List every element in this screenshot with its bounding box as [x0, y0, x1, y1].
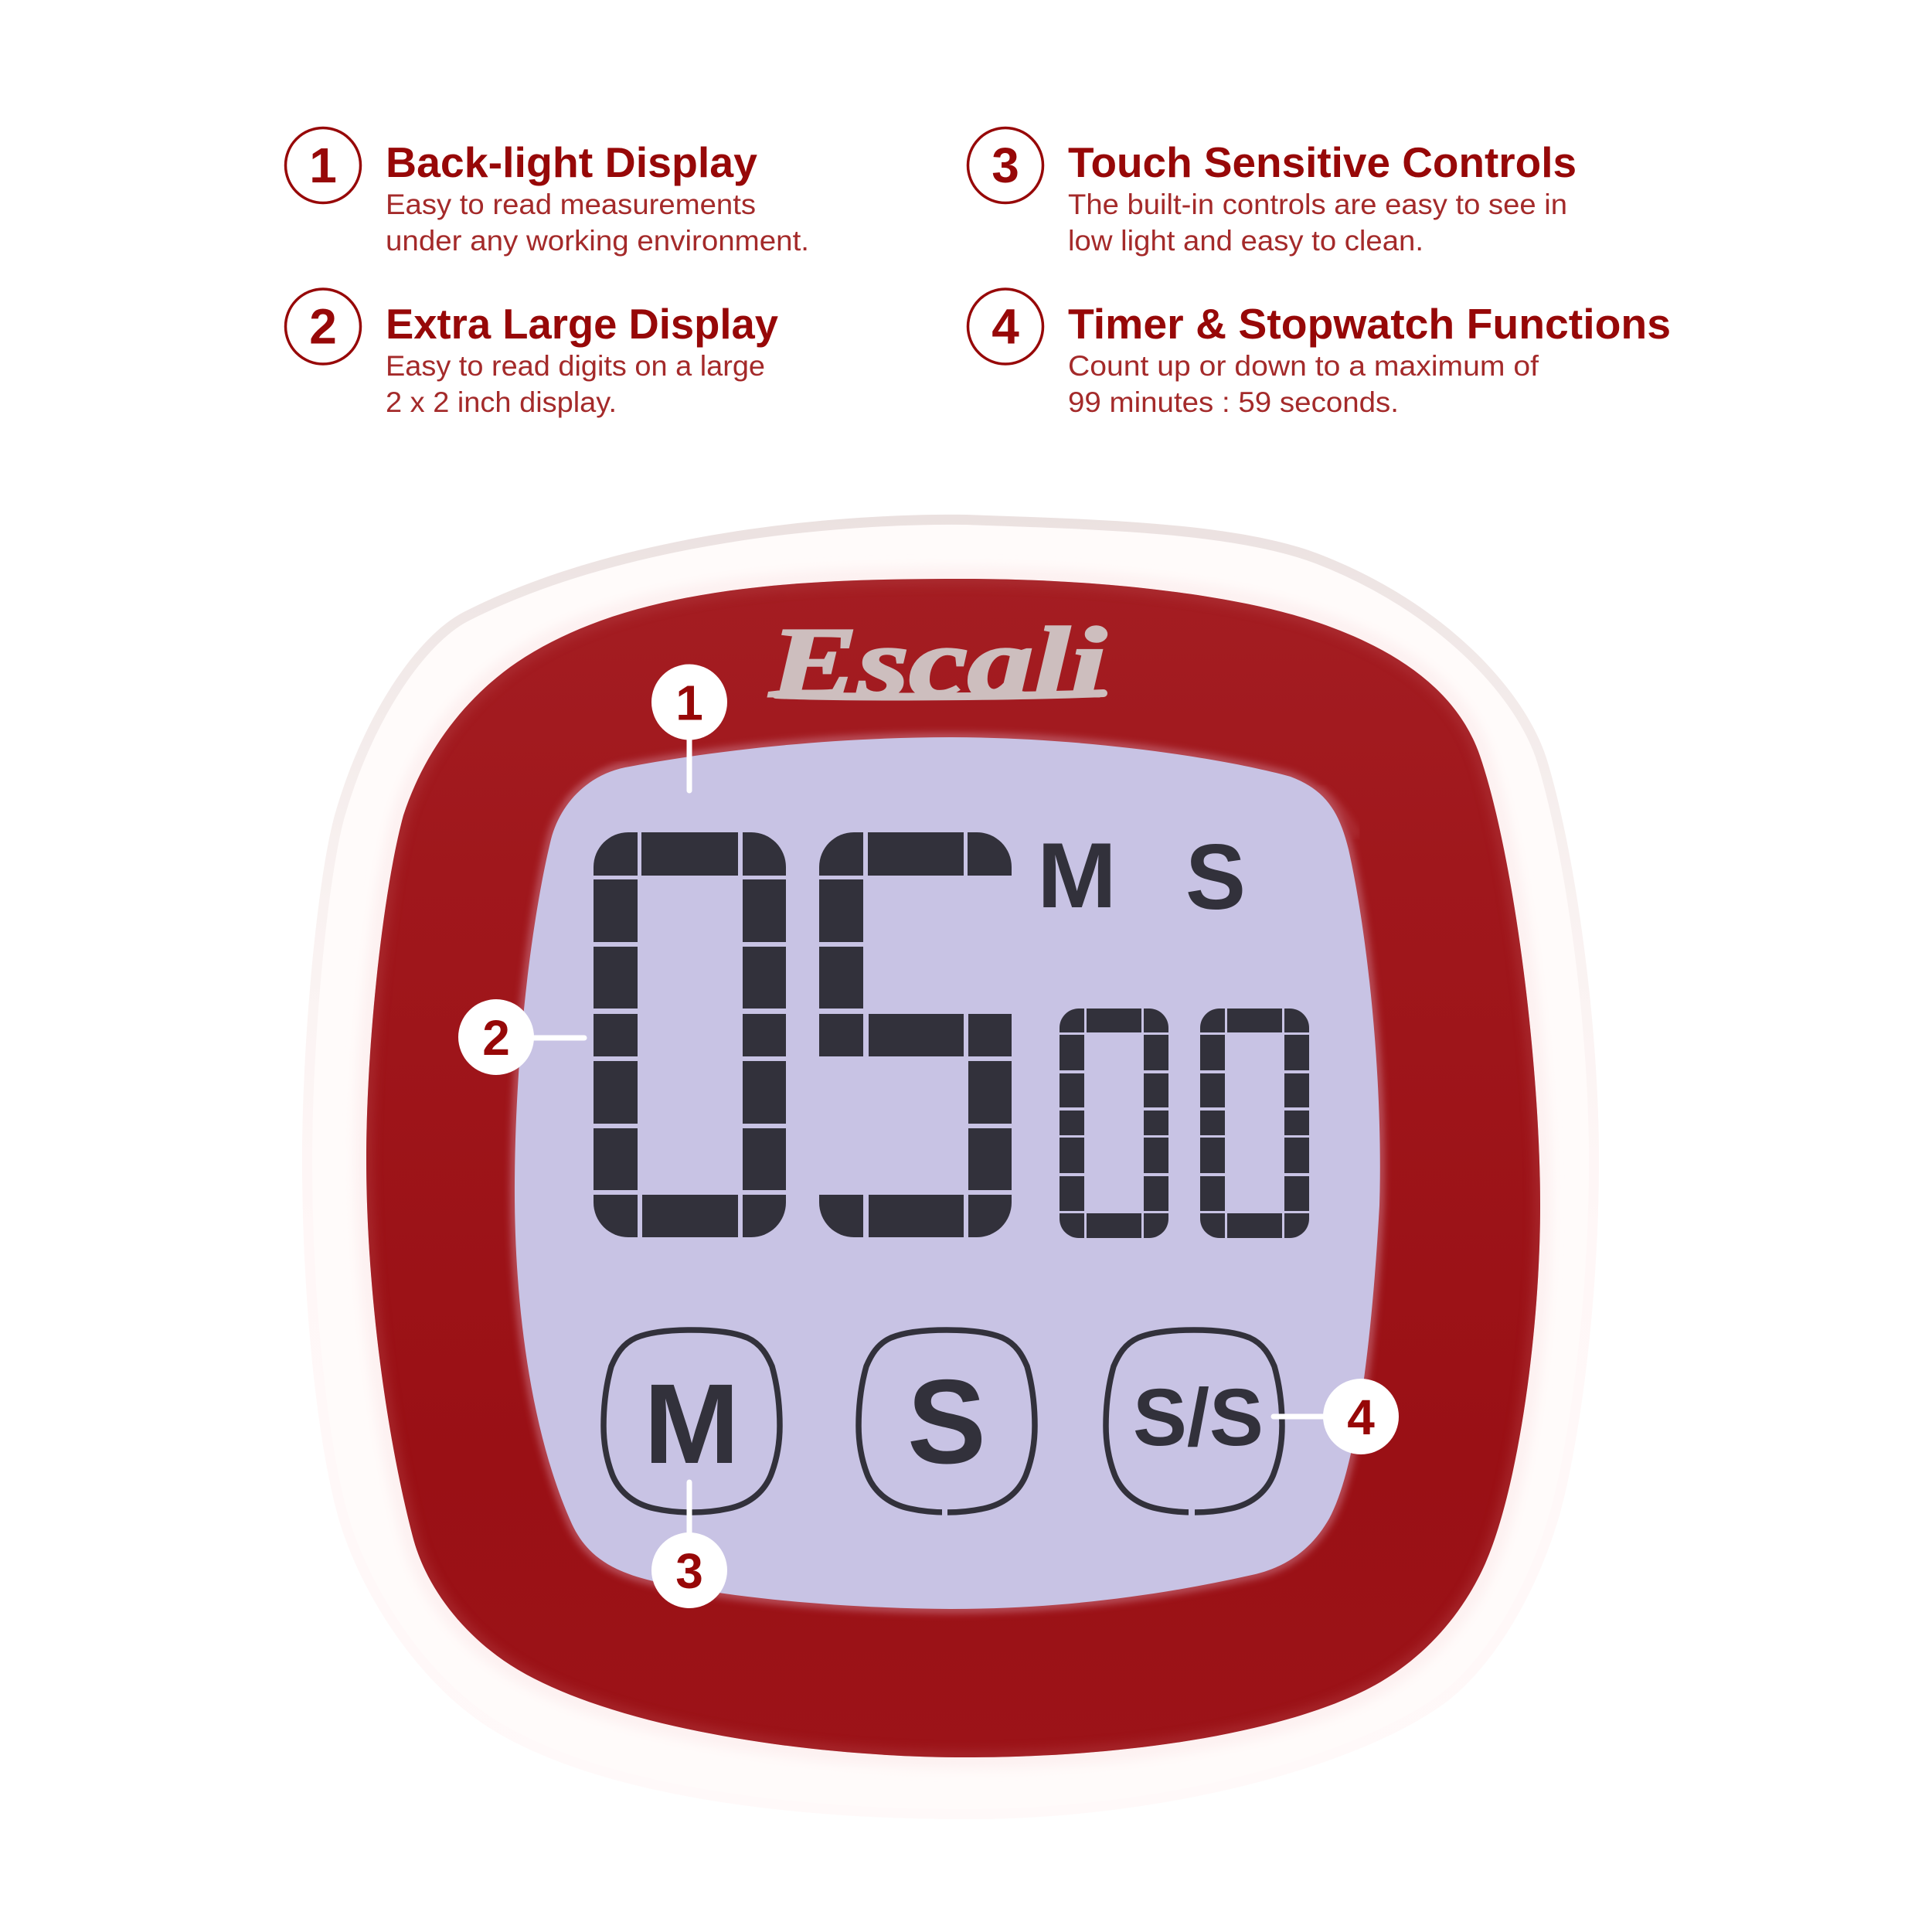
number badge 4 — [968, 289, 1043, 364]
heading: Back-light Display: Back-light Display — [386, 138, 757, 186]
callout 3 — [651, 1482, 727, 1608]
description 3: low light and easy to clean. — [1068, 225, 1423, 257]
number badge 1 — [286, 128, 360, 202]
description 3 — [1068, 189, 1567, 257]
LCD digit: 5 (minutes) — [819, 832, 1012, 1237]
LCD label: M: M — [1037, 824, 1117, 927]
number badge 2: 2 — [309, 298, 337, 354]
LCD digit: 0 (tens of seconds) — [1060, 1009, 1168, 1238]
touch button: S — [859, 1330, 1035, 1518]
touch button: M: M — [644, 1361, 740, 1488]
callout 4: 4 — [1347, 1389, 1375, 1445]
description 4 — [1068, 350, 1539, 418]
description 1: under any working environment. — [386, 225, 809, 257]
legend item 3: touch sensitive controls — [968, 128, 1577, 257]
touch button: S/S — [1106, 1330, 1282, 1518]
callout 3: 3 — [675, 1543, 703, 1599]
description 2: Easy to read digits on a large — [386, 350, 765, 382]
description 2: 2 x 2 inch display. — [386, 386, 617, 418]
LCD screen — [515, 737, 1380, 1609]
touch button: S/S: S/S — [1133, 1372, 1264, 1463]
number badge 4: 4 — [992, 298, 1019, 354]
touch button: M — [604, 1330, 780, 1512]
description 3: The built-in controls are easy to see in — [1068, 189, 1567, 220]
touch button: S: S — [907, 1355, 986, 1488]
LCD label: S: S — [1185, 825, 1246, 929]
number badge 3: 3 — [992, 138, 1019, 193]
heading: Timer & Stopwatch Functions: Timer & Stopwatch Functions — [1068, 300, 1671, 348]
description 1: Easy to read measurements — [386, 189, 756, 220]
legend item 2: extra large display — [286, 289, 778, 418]
callout 1 — [651, 665, 727, 791]
white outer shell — [302, 515, 1599, 1819]
description 4: 99 minutes : 59 seconds. — [1068, 386, 1399, 418]
LCD digit: 0 (tens of minutes) — [594, 832, 786, 1237]
device: kitchen timer — [302, 515, 1599, 1819]
red bezel — [366, 579, 1540, 1757]
legend item 4: timer and stopwatch functions — [968, 289, 1671, 418]
description 4: Count up or down to a maximum of — [1068, 350, 1539, 382]
legend item 1: back-light display — [286, 128, 809, 257]
heading: Extra Large Display: Extra Large Display — [386, 300, 778, 348]
description 2 — [386, 350, 765, 418]
brand logo: Escali: Escali — [769, 607, 1107, 719]
number badge 3 — [968, 128, 1043, 202]
number badge 2 — [286, 289, 360, 364]
number badge 1: 1 — [309, 138, 337, 193]
description 1 — [386, 189, 809, 257]
heading: Touch Sensitive Controls: Touch Sensitive Controls — [1068, 138, 1577, 186]
callout 2: 2 — [482, 1010, 510, 1066]
callout 2 — [458, 999, 584, 1075]
callout 1: 1 — [675, 675, 703, 731]
LCD digit: 0 (seconds) — [1200, 1009, 1309, 1238]
callout 4 — [1274, 1379, 1399, 1454]
